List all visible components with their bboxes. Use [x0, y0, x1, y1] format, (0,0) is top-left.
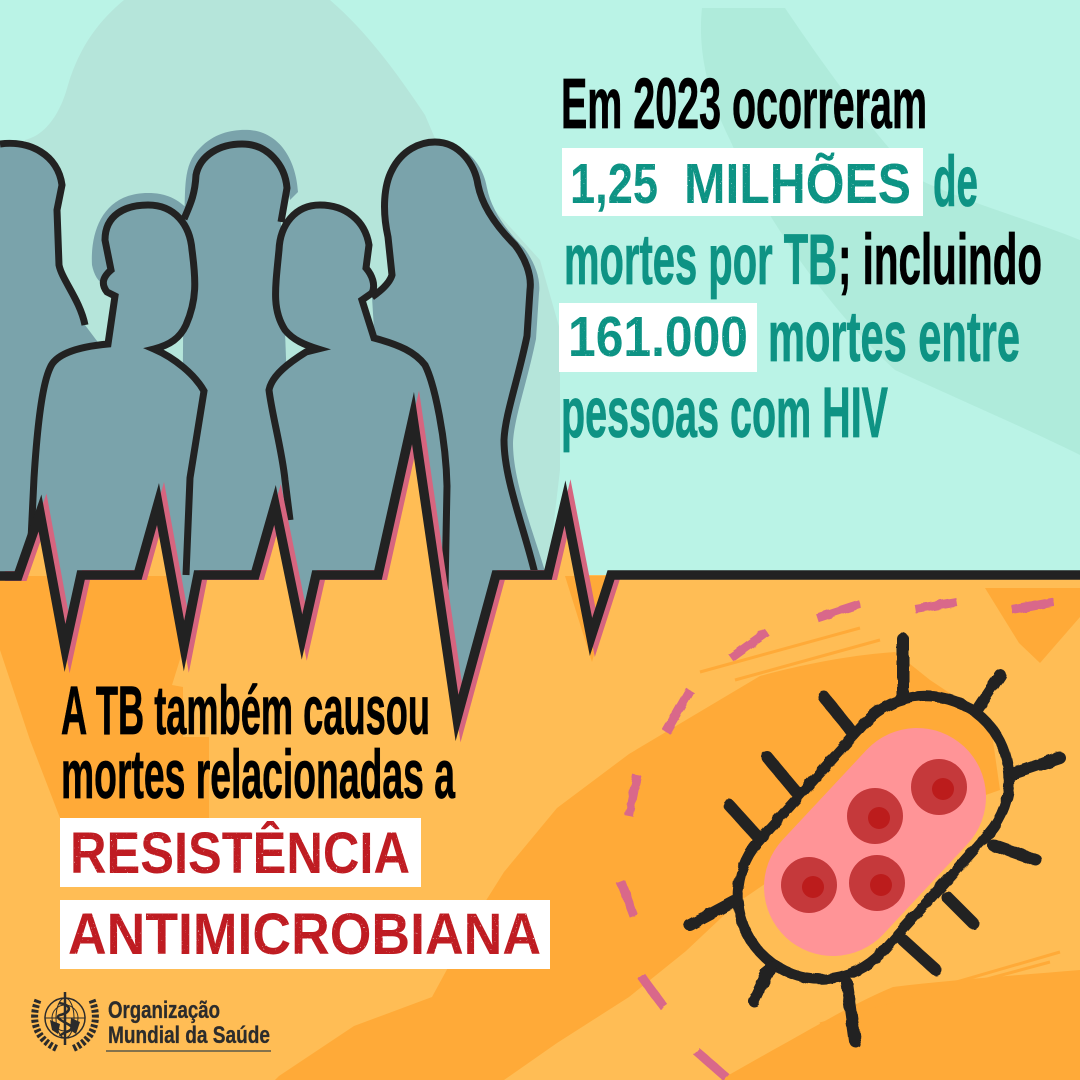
silhouette halo shapes [92, 130, 547, 578]
highlight: antimicrobiana: ANTIMICROBIANA [68, 902, 541, 967]
ECG heartbeat line [0, 418, 1080, 718]
line: mortes relacionadas a: mortes relacionadas a [61, 736, 455, 813]
bacterium nuclei [781, 759, 967, 913]
logo wordmark: Organização [108, 997, 220, 1024]
line: A TB também causou: A TB também causou [61, 672, 430, 749]
people silhouettes group [0, 130, 547, 760]
line: mortes por TB: mortes por TB [564, 221, 837, 300]
highlight: 1,25 milhões [562, 148, 923, 216]
person: back centre [182, 148, 286, 601]
person: back right [372, 146, 490, 682]
highlight: 161.000: 161.000 [568, 305, 748, 369]
dashed pink path around bacterium [621, 602, 1054, 1078]
highlight: resistência: RESISTÊNCIA [70, 821, 410, 886]
text block: 2023 deaths [559, 65, 1042, 453]
icon: WHO emblem [35, 992, 95, 1049]
background: orange lower area with brush strokes [0, 418, 1080, 1080]
person: front left [100, 228, 184, 577]
person: far left [0, 144, 98, 572]
text block: antimicrobial resistance [60, 672, 550, 969]
bacterium spikes [690, 639, 1060, 1041]
person: front right [282, 208, 386, 602]
logo: World Health Organization: Mundial da Saúde [108, 1022, 270, 1049]
bacterium outline [738, 696, 1009, 979]
logo: World Health Organization [35, 992, 271, 1051]
highlight: 1,25 milhões: MILHÕES [684, 152, 911, 216]
icon: bacterium [690, 639, 1060, 1041]
background: mint upper area [0, 0, 1080, 760]
bacterium cell body [833, 797, 917, 887]
highlight: 1,25 milhões: 1,25 [570, 152, 658, 216]
line: de: de [933, 143, 978, 222]
